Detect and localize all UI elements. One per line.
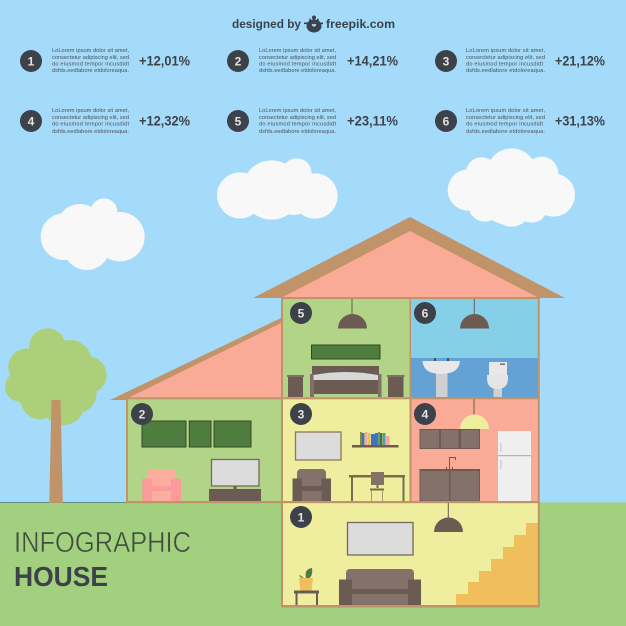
stat 6: 6 <box>443 114 450 128</box>
badge 5: 5 <box>298 306 305 320</box>
stat 2: dsfds.eedlabore etdoloreaqua. <box>259 68 336 74</box>
stat 3: +21,12% <box>555 52 605 68</box>
stat 2: LoLorem ipsum dolor sit amet, <box>259 48 336 54</box>
badge 4: 4 <box>422 408 429 422</box>
badge 6: 6 <box>422 306 429 320</box>
badge 6 <box>414 302 436 324</box>
brown armchair <box>292 469 331 501</box>
stat 6: dsfds.eedlabore etdoloreaqua. <box>466 129 545 135</box>
badge 3: 3 <box>298 408 305 422</box>
stat 4: LoLorem ipsum dolor sit amet, <box>52 108 129 114</box>
cloud left <box>41 198 145 270</box>
stat 1: do eiusmod tempor incusdidt <box>52 62 129 68</box>
credit: designed by freepik <box>232 16 395 32</box>
stat 2: +14,21% <box>347 52 398 68</box>
stat 6: +31,13% <box>555 112 605 128</box>
bed <box>310 366 382 397</box>
lounge lamp <box>434 503 463 532</box>
lower cabinets <box>420 469 480 502</box>
title: INFOGRAPHIC <box>14 527 191 559</box>
credit: designed by freepik: designed by <box>232 17 301 31</box>
cloud middle <box>217 158 338 220</box>
stat 5: consectetur adipiscing elit, sed <box>259 115 336 121</box>
stat 4: dsfds.eedlabore etdoloreaqua. <box>52 129 129 135</box>
bathroom lamp <box>460 298 489 328</box>
badge 2: 2 <box>139 408 146 422</box>
yellow lamp <box>460 398 489 429</box>
stat 3 <box>435 48 605 74</box>
stat 1 <box>20 48 190 74</box>
main roof <box>253 217 565 298</box>
stat 4: +12,32% <box>139 112 190 128</box>
stat 2: consectetur adipiscing elit, sed <box>259 55 336 61</box>
television <box>209 460 261 502</box>
stat 5: do eiusmod tempor incusdidt <box>259 122 336 128</box>
stat 1: consectetur adipiscing elit, sed <box>52 55 129 61</box>
ceiling lamp <box>338 298 367 328</box>
wall picture <box>348 522 413 555</box>
house walls <box>126 297 540 608</box>
stat 3: LoLorem ipsum dolor sit amet, <box>466 48 545 54</box>
toilet <box>487 362 508 397</box>
fridge <box>498 431 531 502</box>
room 4: kitchen <box>410 398 539 503</box>
stat 4: do eiusmod tempor incusdidt <box>52 122 129 128</box>
stat 4 <box>20 108 190 135</box>
stat 2: do eiusmod tempor incusdidt <box>259 62 336 68</box>
stat 5: LoLorem ipsum dolor sit amet, <box>259 108 336 114</box>
pink armchair <box>142 469 181 501</box>
stat 3: dsfds.eedlabore etdoloreaqua. <box>466 68 545 74</box>
badge 1 <box>290 506 312 528</box>
stat 1: +12,01% <box>139 52 190 68</box>
side roof <box>110 318 281 400</box>
cloud right <box>448 148 575 227</box>
room 3: study <box>282 398 410 503</box>
stat 5: 5 <box>235 114 242 128</box>
stat 1: dsfds.eedlabore etdoloreaqua. <box>52 68 129 74</box>
badge 5 <box>290 302 312 324</box>
credit: designed by freepik: freepik.com <box>326 17 395 31</box>
stat 6: consectetur adipiscing elit, sed <box>466 115 545 121</box>
badge 1: 1 <box>298 510 305 524</box>
stat 6 <box>435 108 605 135</box>
bed picture <box>312 345 380 359</box>
stat 6: LoLorem ipsum dolor sit amet, <box>466 108 545 114</box>
wall pictures <box>142 421 251 447</box>
upper cabinets <box>420 429 480 449</box>
stat 5: dsfds.eedlabore etdoloreaqua. <box>259 129 336 135</box>
title: HOUSE <box>14 561 108 592</box>
left nightstand <box>287 375 304 397</box>
stat 1: LoLorem ipsum dolor sit amet, <box>52 48 129 54</box>
stat 2 <box>227 48 398 74</box>
faucet <box>446 458 456 469</box>
stat 2: 2 <box>235 54 242 68</box>
potted plant on table <box>294 568 319 606</box>
ground <box>0 502 626 626</box>
stat 3: 3 <box>443 54 450 68</box>
tree <box>5 328 107 503</box>
stat 4: consectetur adipiscing elit, sed <box>52 115 129 121</box>
stat 5: +23,11% <box>347 112 399 128</box>
right nightstand <box>387 375 404 397</box>
stat 5 <box>227 108 399 135</box>
stat 4: 4 <box>28 114 35 128</box>
stat 3: do eiusmod tempor incusdidt <box>466 62 543 68</box>
room 2: living room <box>127 398 282 503</box>
desk and chair <box>349 472 405 502</box>
badge 3 <box>290 403 312 425</box>
stat 1: 1 <box>28 54 35 68</box>
title <box>14 527 191 592</box>
sofa <box>339 569 421 606</box>
badge 4 <box>414 403 436 425</box>
bookshelf <box>352 432 398 448</box>
staircase <box>456 523 538 606</box>
stat 3: consectetur adipiscing elit, sed <box>466 55 545 61</box>
wall picture <box>296 432 341 460</box>
stat 6: do eiusmod tempor incusdidt <box>466 122 543 128</box>
room 6: bathroom <box>410 297 539 398</box>
room 1: lounge <box>281 503 539 606</box>
sink <box>422 358 460 397</box>
badge 2 <box>131 403 153 425</box>
room 5: bedroom <box>281 297 410 398</box>
